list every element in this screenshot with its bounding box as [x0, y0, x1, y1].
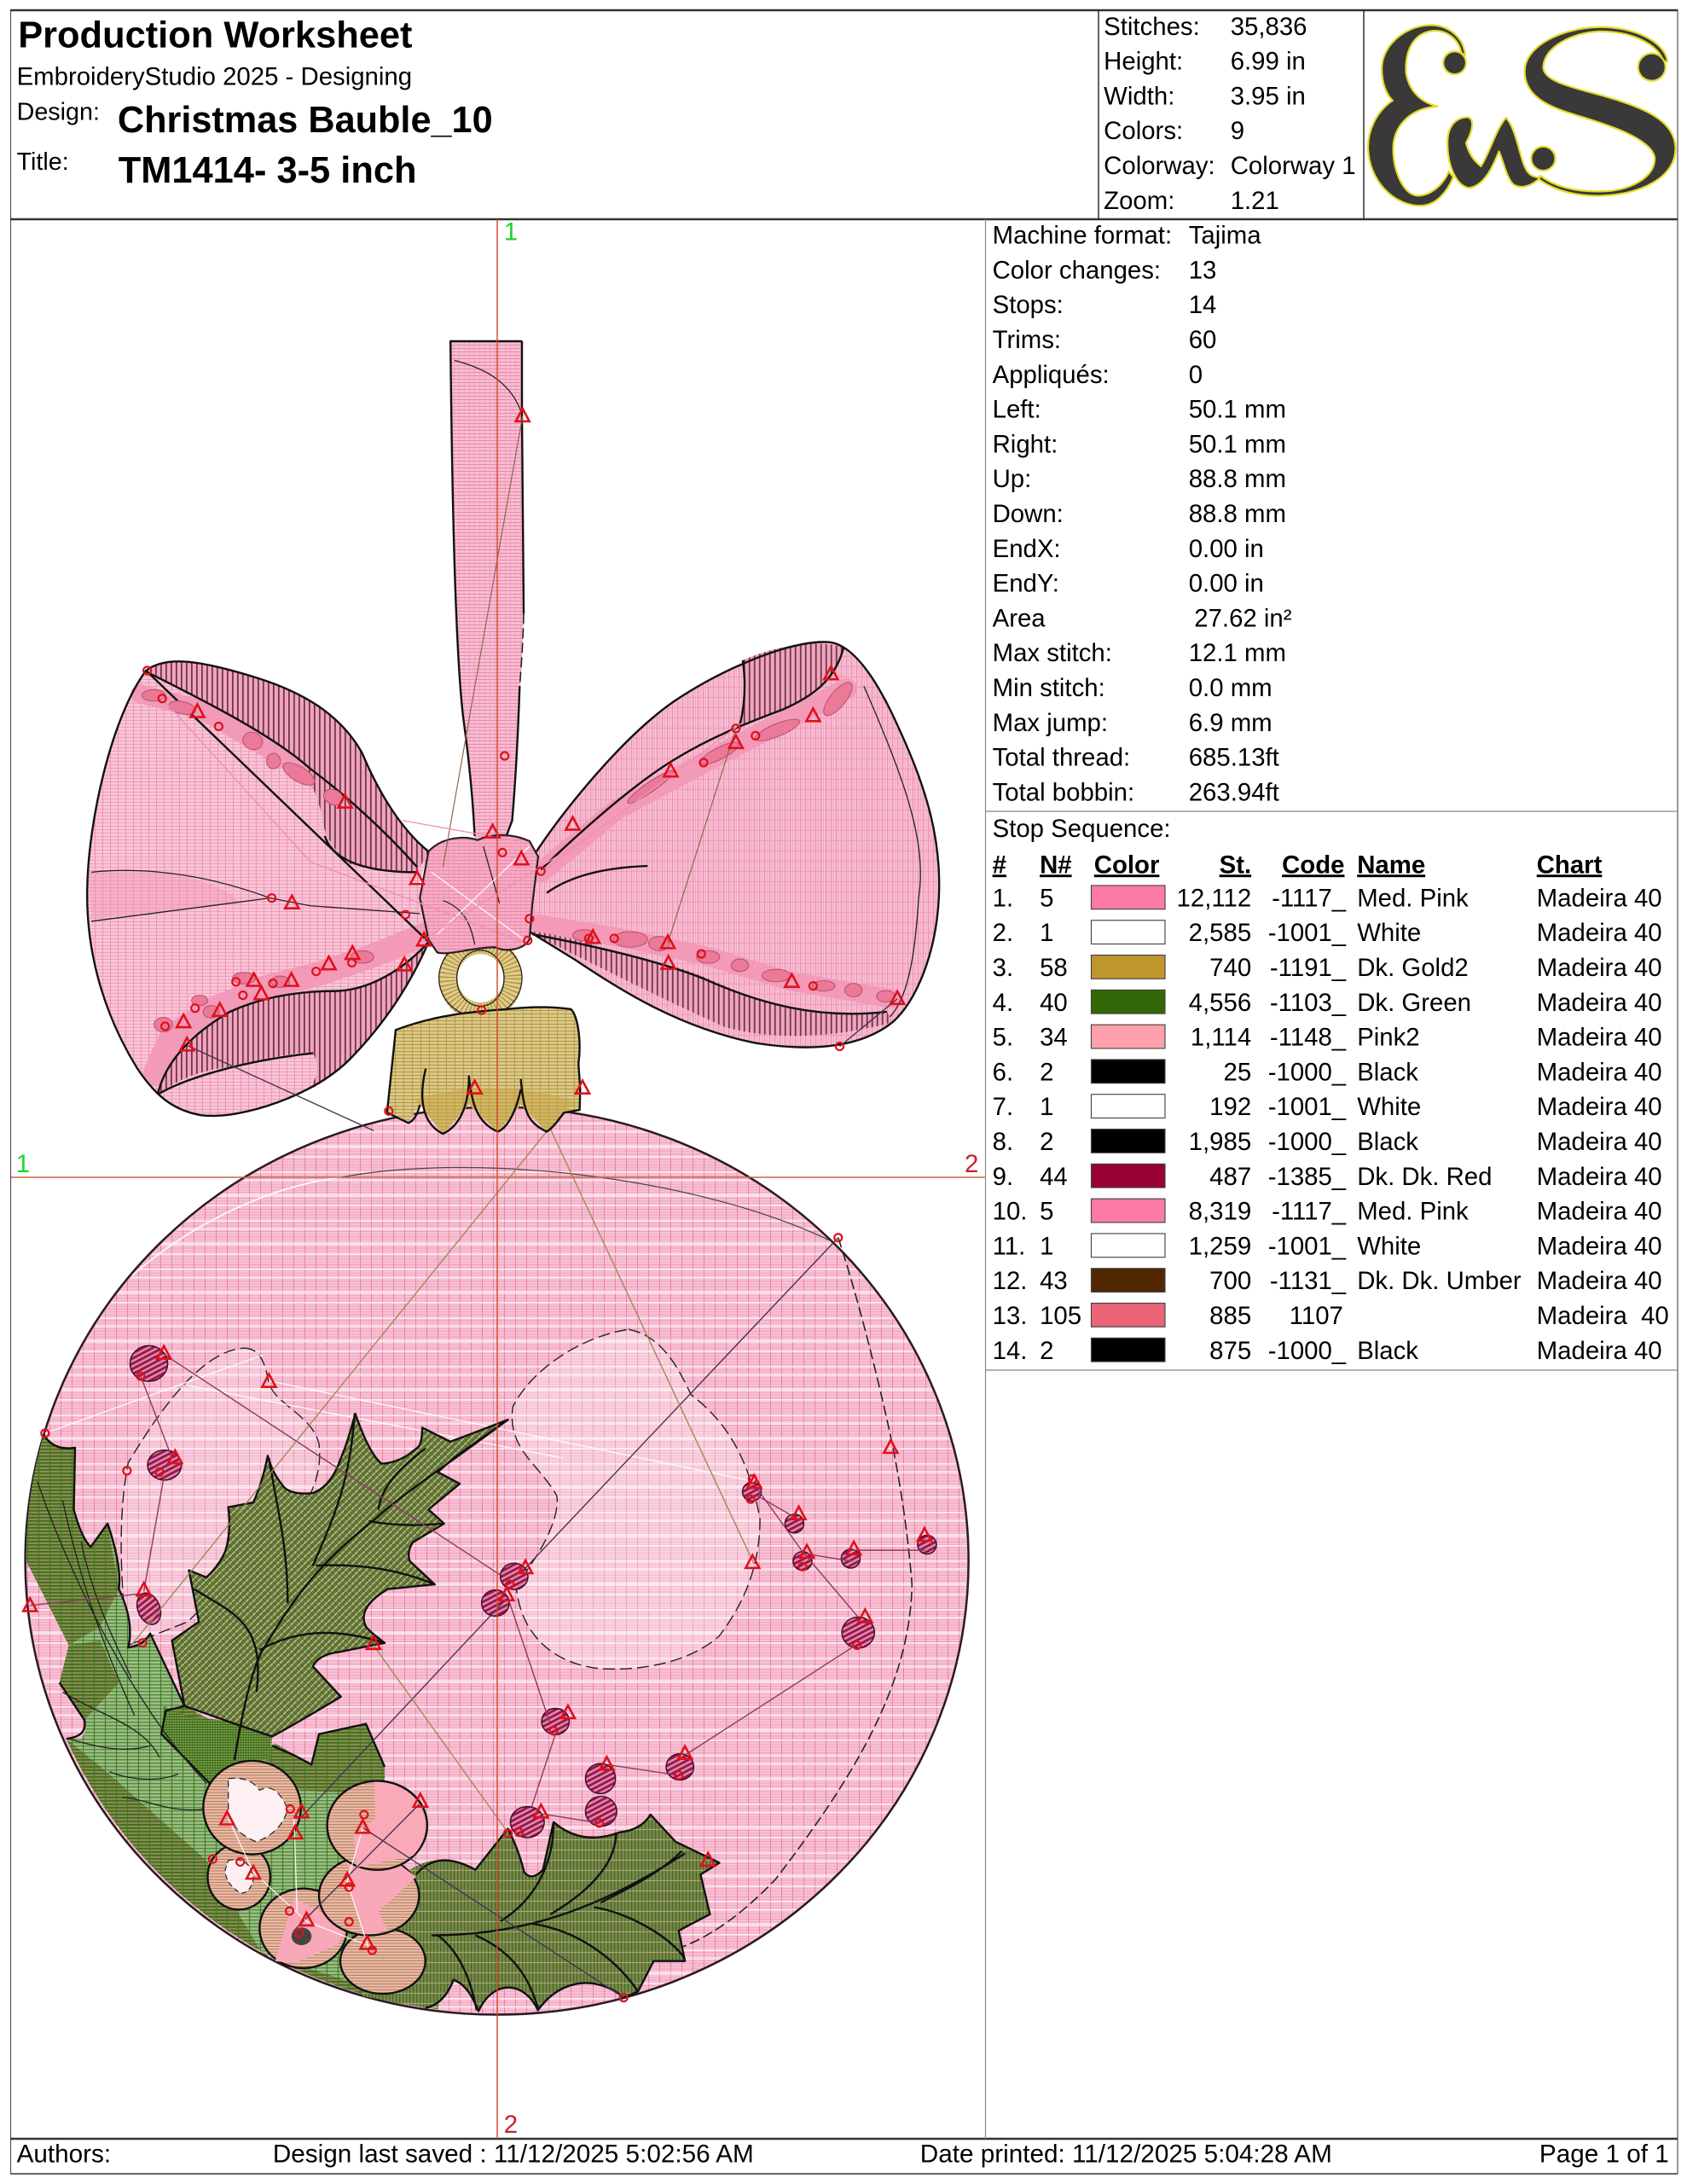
colour swatches: [1091, 886, 1165, 1362]
table rows: Madeira 40: [1537, 1302, 1669, 1330]
table rows: -1000_: [1268, 1337, 1347, 1365]
header statistics: [1104, 13, 1356, 215]
table rows: -1001_: [1268, 1232, 1347, 1260]
peach berries: [203, 1761, 427, 1994]
table rows: Madeira 40: [1537, 1128, 1662, 1156]
table rows: 12,112: [1177, 884, 1251, 912]
centre crosshair: 1: [16, 1150, 30, 1178]
table rows: White: [1357, 1093, 1421, 1121]
gold ring: [439, 939, 522, 1018]
gold cap: [387, 1008, 580, 1134]
table rows: 1.: [993, 884, 1013, 912]
machine statistics list: EndY:: [993, 570, 1059, 598]
table rows: 2: [1040, 1058, 1053, 1086]
crimson small berries: [130, 1345, 936, 1838]
table rows: 40: [1040, 989, 1068, 1017]
table rows: 105: [1040, 1302, 1081, 1330]
table rows: 8.: [993, 1128, 1013, 1156]
header statistics: 6.99 in: [1231, 48, 1306, 76]
upper hatch band: [740, 644, 844, 725]
table header: St.: [1220, 851, 1251, 879]
centre crosshair: 2: [504, 2111, 518, 2139]
upper hatch band: [146, 661, 428, 872]
table header: [993, 851, 1603, 879]
table rows: -1385_: [1268, 1163, 1347, 1191]
table rows: Madeira 40: [1537, 1093, 1662, 1121]
bottom holly leaf: [351, 1815, 719, 2011]
centre crosshair: 1: [504, 218, 518, 247]
right bow wing: [530, 642, 939, 1048]
table rows: -1117_: [1272, 884, 1347, 912]
header statistics: Stitches:: [1104, 13, 1200, 41]
footer: [17, 2140, 1669, 2168]
red stop markers: [23, 1234, 931, 2001]
table rows: 700: [1209, 1267, 1251, 1295]
machine statistics list: Area: [993, 604, 1046, 632]
green foliage base: [26, 1435, 450, 2009]
table rows: Med. Pink: [1357, 1198, 1469, 1226]
table header: Code: [1282, 851, 1345, 879]
table rows: 1,985: [1189, 1128, 1251, 1156]
table rows: Madeira 40: [1537, 954, 1662, 982]
stop sequence table: [993, 815, 1669, 1365]
table rows: 13.: [993, 1302, 1027, 1330]
table rows: 14.: [993, 1337, 1027, 1365]
machine statistics list: 0: [1189, 361, 1203, 389]
table rows: 12.: [993, 1267, 1027, 1295]
table rows: 1: [1040, 1093, 1053, 1121]
machine statistics list: EndX:: [993, 535, 1061, 563]
table rows: 1107: [1290, 1302, 1343, 1330]
stop sequence table: Stop Sequence:: [993, 815, 1171, 843]
machine statistics list: 50.1 mm: [1189, 396, 1286, 424]
header statistics: Zoom:: [1104, 187, 1174, 215]
white stitch highlight: central heart: [45, 1238, 912, 1947]
table rows: 25: [1223, 1058, 1251, 1086]
table rows: Madeira 40: [1537, 1267, 1662, 1295]
header title block: Title:: [17, 148, 69, 176]
table rows: -1000_: [1268, 1058, 1347, 1086]
machine statistics list: 12.1 mm: [1189, 639, 1286, 667]
machine statistics list: 88.8 mm: [1189, 465, 1286, 493]
machine statistics list: Trims:: [993, 326, 1061, 354]
table rows: White: [1357, 1232, 1421, 1260]
table rows: 1: [1040, 919, 1053, 947]
lower hatch band: [532, 932, 893, 1036]
footer: Page 1 of 1: [1539, 2140, 1669, 2168]
bauble ball: [26, 1107, 969, 2015]
table header: Name: [1357, 851, 1425, 879]
table rows: -1103_: [1270, 989, 1347, 1017]
machine statistics list: 0.00 in: [1189, 535, 1264, 563]
header statistics: 3.95 in: [1231, 82, 1306, 110]
header title block: Production Worksheet: [18, 15, 412, 55]
table rows: Med. Pink: [1357, 884, 1469, 912]
machine statistics list: 685.13ft: [1189, 744, 1279, 772]
machine statistics list: 0.0 mm: [1189, 674, 1272, 702]
machine statistics list: Left:: [993, 396, 1041, 424]
table rows: -1131_: [1270, 1267, 1347, 1295]
machine statistics list: Tajima: [1189, 222, 1261, 250]
table rows: -1001_: [1268, 1093, 1347, 1121]
centre crosshair: 2: [965, 1150, 978, 1178]
machine statistics list: 14: [1189, 291, 1216, 319]
table rows: 43: [1040, 1267, 1068, 1295]
table rows: Dk. Green: [1357, 989, 1471, 1017]
table rows: 5: [1040, 1198, 1053, 1226]
table rows: 10.: [993, 1198, 1027, 1226]
machine statistics list: Total bobbin:: [993, 778, 1134, 806]
table rows: -1191_: [1270, 954, 1347, 982]
header statistics: Width:: [1104, 82, 1174, 110]
machine statistics list: Down:: [993, 500, 1064, 528]
machine statistics list: Appliqués:: [993, 361, 1110, 389]
machine statistics list: Min stitch:: [993, 674, 1105, 702]
table rows: 885: [1209, 1302, 1251, 1330]
machine statistics list: 0.00 in: [1189, 570, 1264, 598]
machine statistics list: 263.94ft: [1189, 778, 1279, 806]
machine statistics list: Total thread:: [993, 744, 1130, 772]
header statistics: 1.21: [1231, 187, 1279, 215]
header statistics: Colorway:: [1104, 152, 1215, 180]
header title block: [17, 15, 493, 191]
table rows: 2.: [993, 919, 1013, 947]
table header: Chart: [1537, 851, 1603, 879]
table rows: Madeira 40: [1537, 1163, 1662, 1191]
machine statistics list: 60: [1189, 326, 1216, 354]
centre knot: [420, 835, 538, 953]
bow, ribbon and cap group: [87, 341, 939, 1134]
table rows: 4.: [993, 989, 1013, 1017]
table rows: 5.: [993, 1024, 1013, 1052]
machine statistics list: 6.9 mm: [1189, 709, 1272, 737]
footer: Date printed: 11/12/2025 5:04:28 AM: [920, 2140, 1332, 2168]
header statistics: Height:: [1104, 48, 1183, 76]
table rows: 44: [1040, 1163, 1068, 1191]
table rows: Madeira 40: [1537, 989, 1662, 1017]
machine statistics list: [993, 222, 1292, 806]
table rows: Madeira 40: [1537, 1232, 1662, 1260]
table rows: -1117_: [1272, 1198, 1347, 1226]
table rows: 34: [1040, 1024, 1068, 1052]
table rows: 2: [1040, 1337, 1053, 1365]
bow stop markers: [143, 409, 904, 1115]
holly and berries group: [23, 1128, 936, 2011]
table rows: 192: [1209, 1093, 1251, 1121]
header title block: TM1414- 3-5 inch: [119, 150, 417, 191]
footer: Design last saved : 11/12/2025 5:02:56 AM: [273, 2140, 754, 2168]
table rows: 740: [1209, 954, 1251, 982]
thread jump lines: [30, 1128, 925, 1997]
table rows: Pink2: [1357, 1024, 1420, 1052]
machine statistics list: 50.1 mm: [1189, 430, 1286, 458]
table rows: 6.: [993, 1058, 1013, 1086]
left bow wing: [87, 661, 428, 1116]
table rows: Dk. Dk. Umber: [1357, 1267, 1522, 1295]
header title block: EmbroideryStudio 2025 - Designing: [17, 63, 412, 91]
table rows: Madeira 40: [1537, 919, 1662, 947]
table rows: Black: [1357, 1058, 1418, 1086]
table header: #: [993, 851, 1006, 879]
bow thread jumps: [160, 360, 897, 1130]
logo EuS: [1368, 25, 1676, 206]
table rows: Black: [1357, 1337, 1418, 1365]
table rows: -1000_: [1268, 1128, 1347, 1156]
table rows: 487: [1209, 1163, 1251, 1191]
table rows: 11.: [993, 1232, 1025, 1260]
table header: N#: [1040, 851, 1072, 879]
upper ball contour line: [132, 1177, 341, 1275]
table rows: 7.: [993, 1093, 1013, 1121]
table rows: 5: [1040, 884, 1053, 912]
table rows: 1: [1040, 1232, 1053, 1260]
machine statistics list: Max jump:: [993, 709, 1108, 737]
header statistics: Colorway 1: [1231, 152, 1356, 180]
table rows: White: [1357, 919, 1421, 947]
machine statistics list: Machine format:: [993, 222, 1172, 250]
footer: Authors:: [17, 2140, 111, 2168]
table rows: 1,259: [1189, 1232, 1251, 1260]
table rows: Dk. Gold2: [1357, 954, 1469, 982]
table rows: 875: [1209, 1337, 1251, 1365]
table rows: 1,114: [1191, 1024, 1251, 1052]
header title block: Christmas Bauble_10: [118, 100, 493, 141]
table rows: 3.: [993, 954, 1013, 982]
table header: Color: [1094, 851, 1159, 879]
lower hatch band: [158, 942, 428, 1095]
machine statistics list: 27.62 in²: [1194, 604, 1292, 632]
machine statistics list: Max stitch:: [993, 639, 1112, 667]
machine statistics list: 88.8 mm: [1189, 500, 1286, 528]
ribbon loop: [450, 341, 524, 839]
machine statistics list: Color changes:: [993, 256, 1161, 284]
table rows: Madeira 40: [1537, 1024, 1662, 1052]
centre crosshair: [11, 218, 985, 2139]
header title block: Design:: [17, 98, 100, 125]
machine statistics list: Up:: [993, 465, 1031, 493]
machine statistics list: Stops:: [993, 291, 1064, 319]
table rows: 4,556: [1189, 989, 1251, 1017]
table rows: 9.: [993, 1163, 1013, 1191]
table rows: 2: [1040, 1128, 1053, 1156]
table rows: -1001_: [1268, 919, 1347, 947]
machine statistics list: 13: [1189, 256, 1216, 284]
table rows: Madeira 40: [1537, 884, 1662, 912]
machine statistics list: Right:: [993, 430, 1058, 458]
table rows: Madeira 40: [1537, 1058, 1662, 1086]
header statistics: Colors:: [1104, 117, 1183, 145]
main holly leaf: [172, 1414, 508, 1760]
table rows: Dk. Dk. Red: [1357, 1163, 1492, 1191]
header statistics: 35,836: [1231, 13, 1307, 41]
table rows: Madeira 40: [1537, 1337, 1662, 1365]
table rows: -1148_: [1270, 1024, 1347, 1052]
table rows: 2,585: [1189, 919, 1251, 947]
table rows: 58: [1040, 954, 1068, 982]
table rows: Madeira 40: [1537, 1198, 1662, 1226]
table rows: Black: [1357, 1128, 1418, 1156]
header statistics: 9: [1231, 117, 1244, 145]
table rows: [993, 884, 1669, 1365]
table rows: 8,319: [1189, 1198, 1251, 1226]
